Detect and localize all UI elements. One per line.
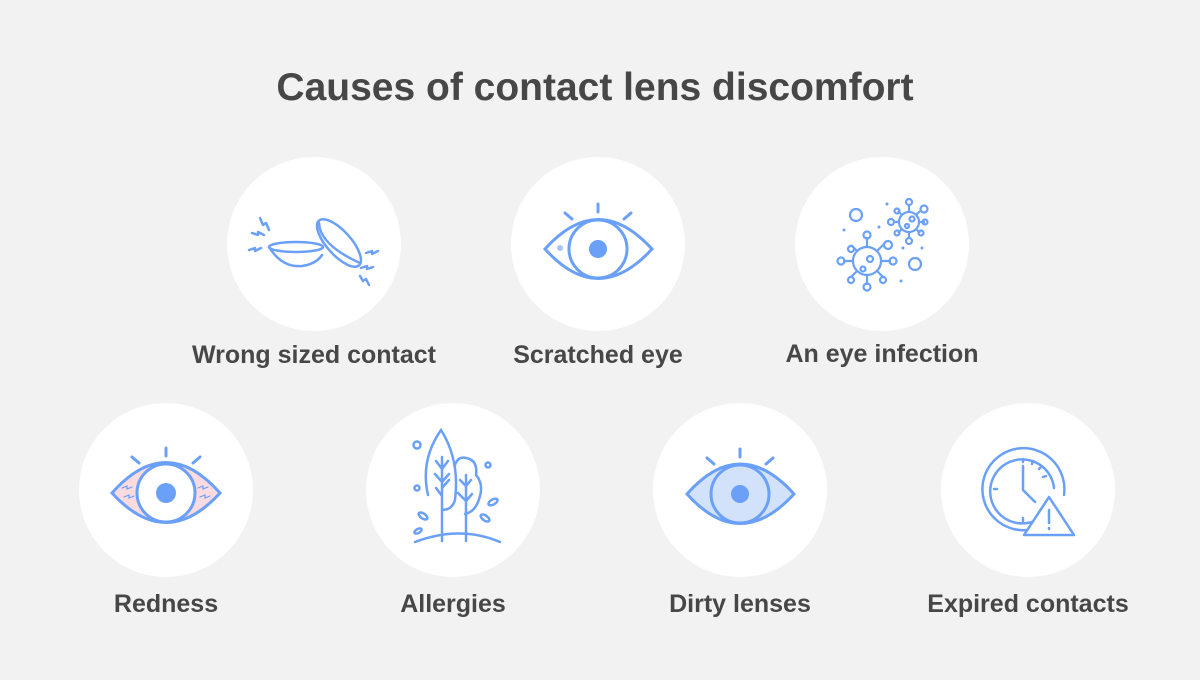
labels: Wrong sized contact [192,341,437,369]
text: Redness [114,590,218,618]
icon: scratched eye [545,204,652,278]
icon: contact lenses [249,213,378,285]
text: Scratched eye [513,341,683,369]
title: Causes of contact lens discomfort [276,66,914,109]
icon: clock warning [982,448,1074,535]
text: An eye infection [785,340,979,368]
text: Expired contacts [927,590,1129,618]
icon: virus [838,199,928,290]
text: Allergies [400,590,506,618]
icon: red eye [112,448,220,522]
icon: dirty lens eye [687,449,794,524]
icon: trees [414,430,500,542]
text: Dirty lenses [669,590,811,618]
